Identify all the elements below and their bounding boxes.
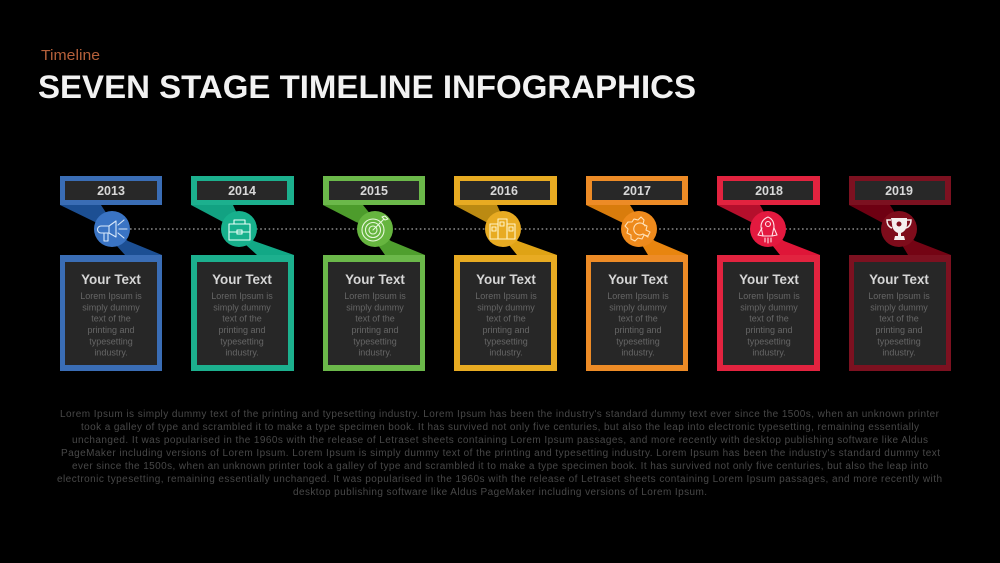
text card 2017: typesetting bbox=[616, 336, 660, 346]
icon: target bbox=[357, 211, 393, 247]
body paragraph bbox=[57, 409, 942, 498]
text card 2018: printing and bbox=[745, 325, 793, 335]
year box 2018 bbox=[717, 176, 820, 205]
year box 2017: 2017 bbox=[623, 184, 651, 198]
text card 2019: industry. bbox=[882, 348, 916, 358]
text card 2016: text of the bbox=[486, 314, 526, 324]
body paragraph: took a galley of type and scrambled it to make a type specimen book. It has survived not only five centuries, but also the leap into electronic typesetting, remaining essentially bbox=[81, 422, 919, 433]
year box 2014: 2014 bbox=[228, 184, 256, 198]
icon: gears bbox=[621, 211, 657, 247]
icon: trophy bbox=[881, 211, 917, 247]
year box 2013 bbox=[60, 176, 162, 205]
text card 2014: printing and bbox=[218, 325, 266, 335]
text card 2014: industry. bbox=[225, 348, 259, 358]
text card 2019: Your Text bbox=[869, 272, 929, 287]
year box 2015: 2015 bbox=[360, 184, 388, 198]
text card 2017: Lorem Ipsum is bbox=[607, 291, 669, 301]
dotted connector line bbox=[130, 228, 882, 230]
icon: megaphone bbox=[94, 211, 130, 247]
text card 2017 bbox=[586, 255, 688, 371]
text card 2017: simply dummy bbox=[609, 302, 667, 312]
stage 2019 bbox=[849, 176, 951, 371]
text card 2018: industry. bbox=[752, 348, 786, 358]
text card 2015: Lorem Ipsum is bbox=[344, 291, 406, 301]
body paragraph: electronic typesetting, remaining essentially unchanged. It was popularised in the 1960s with the release of Letraset sheets containing Lorem Ipsum passages, and more recently with bbox=[57, 474, 942, 485]
text card 2018: text of the bbox=[749, 314, 789, 324]
text card 2013: Lorem Ipsum is bbox=[80, 291, 142, 301]
year box 2017 bbox=[586, 176, 688, 205]
text card 2015: Your Text bbox=[345, 272, 405, 287]
text card 2015 bbox=[323, 255, 425, 371]
body paragraph: ever since the 1500s, when an unknown printer took a galley of type and scrambled it to make a type specimen book. It has survived not only five centuries, but also the leap into bbox=[72, 461, 928, 472]
stage 2018 bbox=[717, 176, 820, 371]
text card 2019: simply dummy bbox=[870, 302, 928, 312]
text card 2013: Your Text bbox=[81, 272, 141, 287]
text card 2019: text of the bbox=[879, 314, 919, 324]
text card 2016: simply dummy bbox=[477, 302, 535, 312]
text card 2017: text of the bbox=[618, 314, 658, 324]
text card 2017: printing and bbox=[614, 325, 662, 335]
body paragraph: Lorem Ipsum is simply dummy text of the printing and typesetting industry. Lorem Ipsum has been the industry's standard dummy text ever since the 1500s, when an unknown printer bbox=[60, 409, 940, 420]
text card 2016: Lorem Ipsum is bbox=[475, 291, 537, 301]
text card 2017: industry. bbox=[621, 348, 655, 358]
year box 2016 bbox=[454, 176, 557, 205]
year box 2019 bbox=[849, 176, 951, 205]
year box 2013: 2013 bbox=[97, 184, 125, 198]
year box 2018: 2018 bbox=[755, 184, 783, 198]
text card 2013: printing and bbox=[87, 325, 135, 335]
body paragraph: unchanged. It was popularised in the 1960s with the release of Letraset sheets containing Lorem Ipsum passages, and more recently with desktop publishing software like Aldus bbox=[72, 435, 928, 446]
text card 2013: typesetting bbox=[89, 336, 133, 346]
text card 2016: printing and bbox=[482, 325, 530, 335]
text card 2019 bbox=[849, 255, 951, 371]
stage 2015 bbox=[323, 176, 425, 371]
year box 2016: 2016 bbox=[490, 184, 518, 198]
text card 2018: Lorem Ipsum is bbox=[738, 291, 800, 301]
text card 2018: Your Text bbox=[739, 272, 799, 287]
text card 2015: text of the bbox=[355, 314, 395, 324]
text card 2014: Your Text bbox=[212, 272, 272, 287]
text card 2019: Lorem Ipsum is bbox=[868, 291, 930, 301]
text card 2019: typesetting bbox=[877, 336, 921, 346]
stage 2013 bbox=[60, 176, 162, 371]
text card 2014: text of the bbox=[222, 314, 262, 324]
stage 2014 bbox=[191, 176, 294, 371]
section label: Timeline bbox=[41, 48, 100, 64]
stage 2016 bbox=[454, 176, 557, 371]
text card 2015: printing and bbox=[351, 325, 399, 335]
title: SEVEN STAGE TIMELINE INFOGRAPHICS bbox=[38, 69, 696, 105]
body paragraph: desktop publishing software like Aldus PageMaker including versions of Lorem Ipsum. bbox=[293, 487, 707, 498]
text card 2015: simply dummy bbox=[346, 302, 404, 312]
body paragraph: PageMaker including versions of Lorem Ipsum. Lorem Ipsum is simply dummy text of the printing and typesetting industry. Lorem Ipsum has been the industry's standard dummy text bbox=[61, 448, 940, 459]
text card 2013 bbox=[60, 255, 162, 371]
text card 2013: simply dummy bbox=[82, 302, 140, 312]
text card 2016 bbox=[454, 255, 557, 371]
stage 2017 bbox=[586, 176, 688, 371]
text card 2014: simply dummy bbox=[213, 302, 271, 312]
text card 2015: industry. bbox=[358, 348, 392, 358]
text card 2017: Your Text bbox=[608, 272, 668, 287]
text card 2016: typesetting bbox=[484, 336, 528, 346]
year box 2019: 2019 bbox=[885, 184, 913, 198]
text card 2014: Lorem Ipsum is bbox=[211, 291, 273, 301]
text card 2016: Your Text bbox=[476, 272, 536, 287]
year box 2015 bbox=[323, 176, 425, 205]
text card 2013: text of the bbox=[91, 314, 131, 324]
icon: rocket bbox=[750, 211, 786, 247]
text card 2014: typesetting bbox=[220, 336, 264, 346]
text card 2018 bbox=[717, 255, 820, 371]
icon: three panels bbox=[485, 211, 521, 247]
year box 2014 bbox=[191, 176, 294, 205]
text card 2014 bbox=[191, 255, 294, 371]
text card 2018: simply dummy bbox=[740, 302, 798, 312]
text card 2018: typesetting bbox=[747, 336, 791, 346]
text card 2019: printing and bbox=[875, 325, 923, 335]
icon: briefcase bbox=[221, 211, 257, 247]
text card 2013: industry. bbox=[94, 348, 128, 358]
text card 2015: typesetting bbox=[353, 336, 397, 346]
text card 2016: industry. bbox=[489, 348, 523, 358]
